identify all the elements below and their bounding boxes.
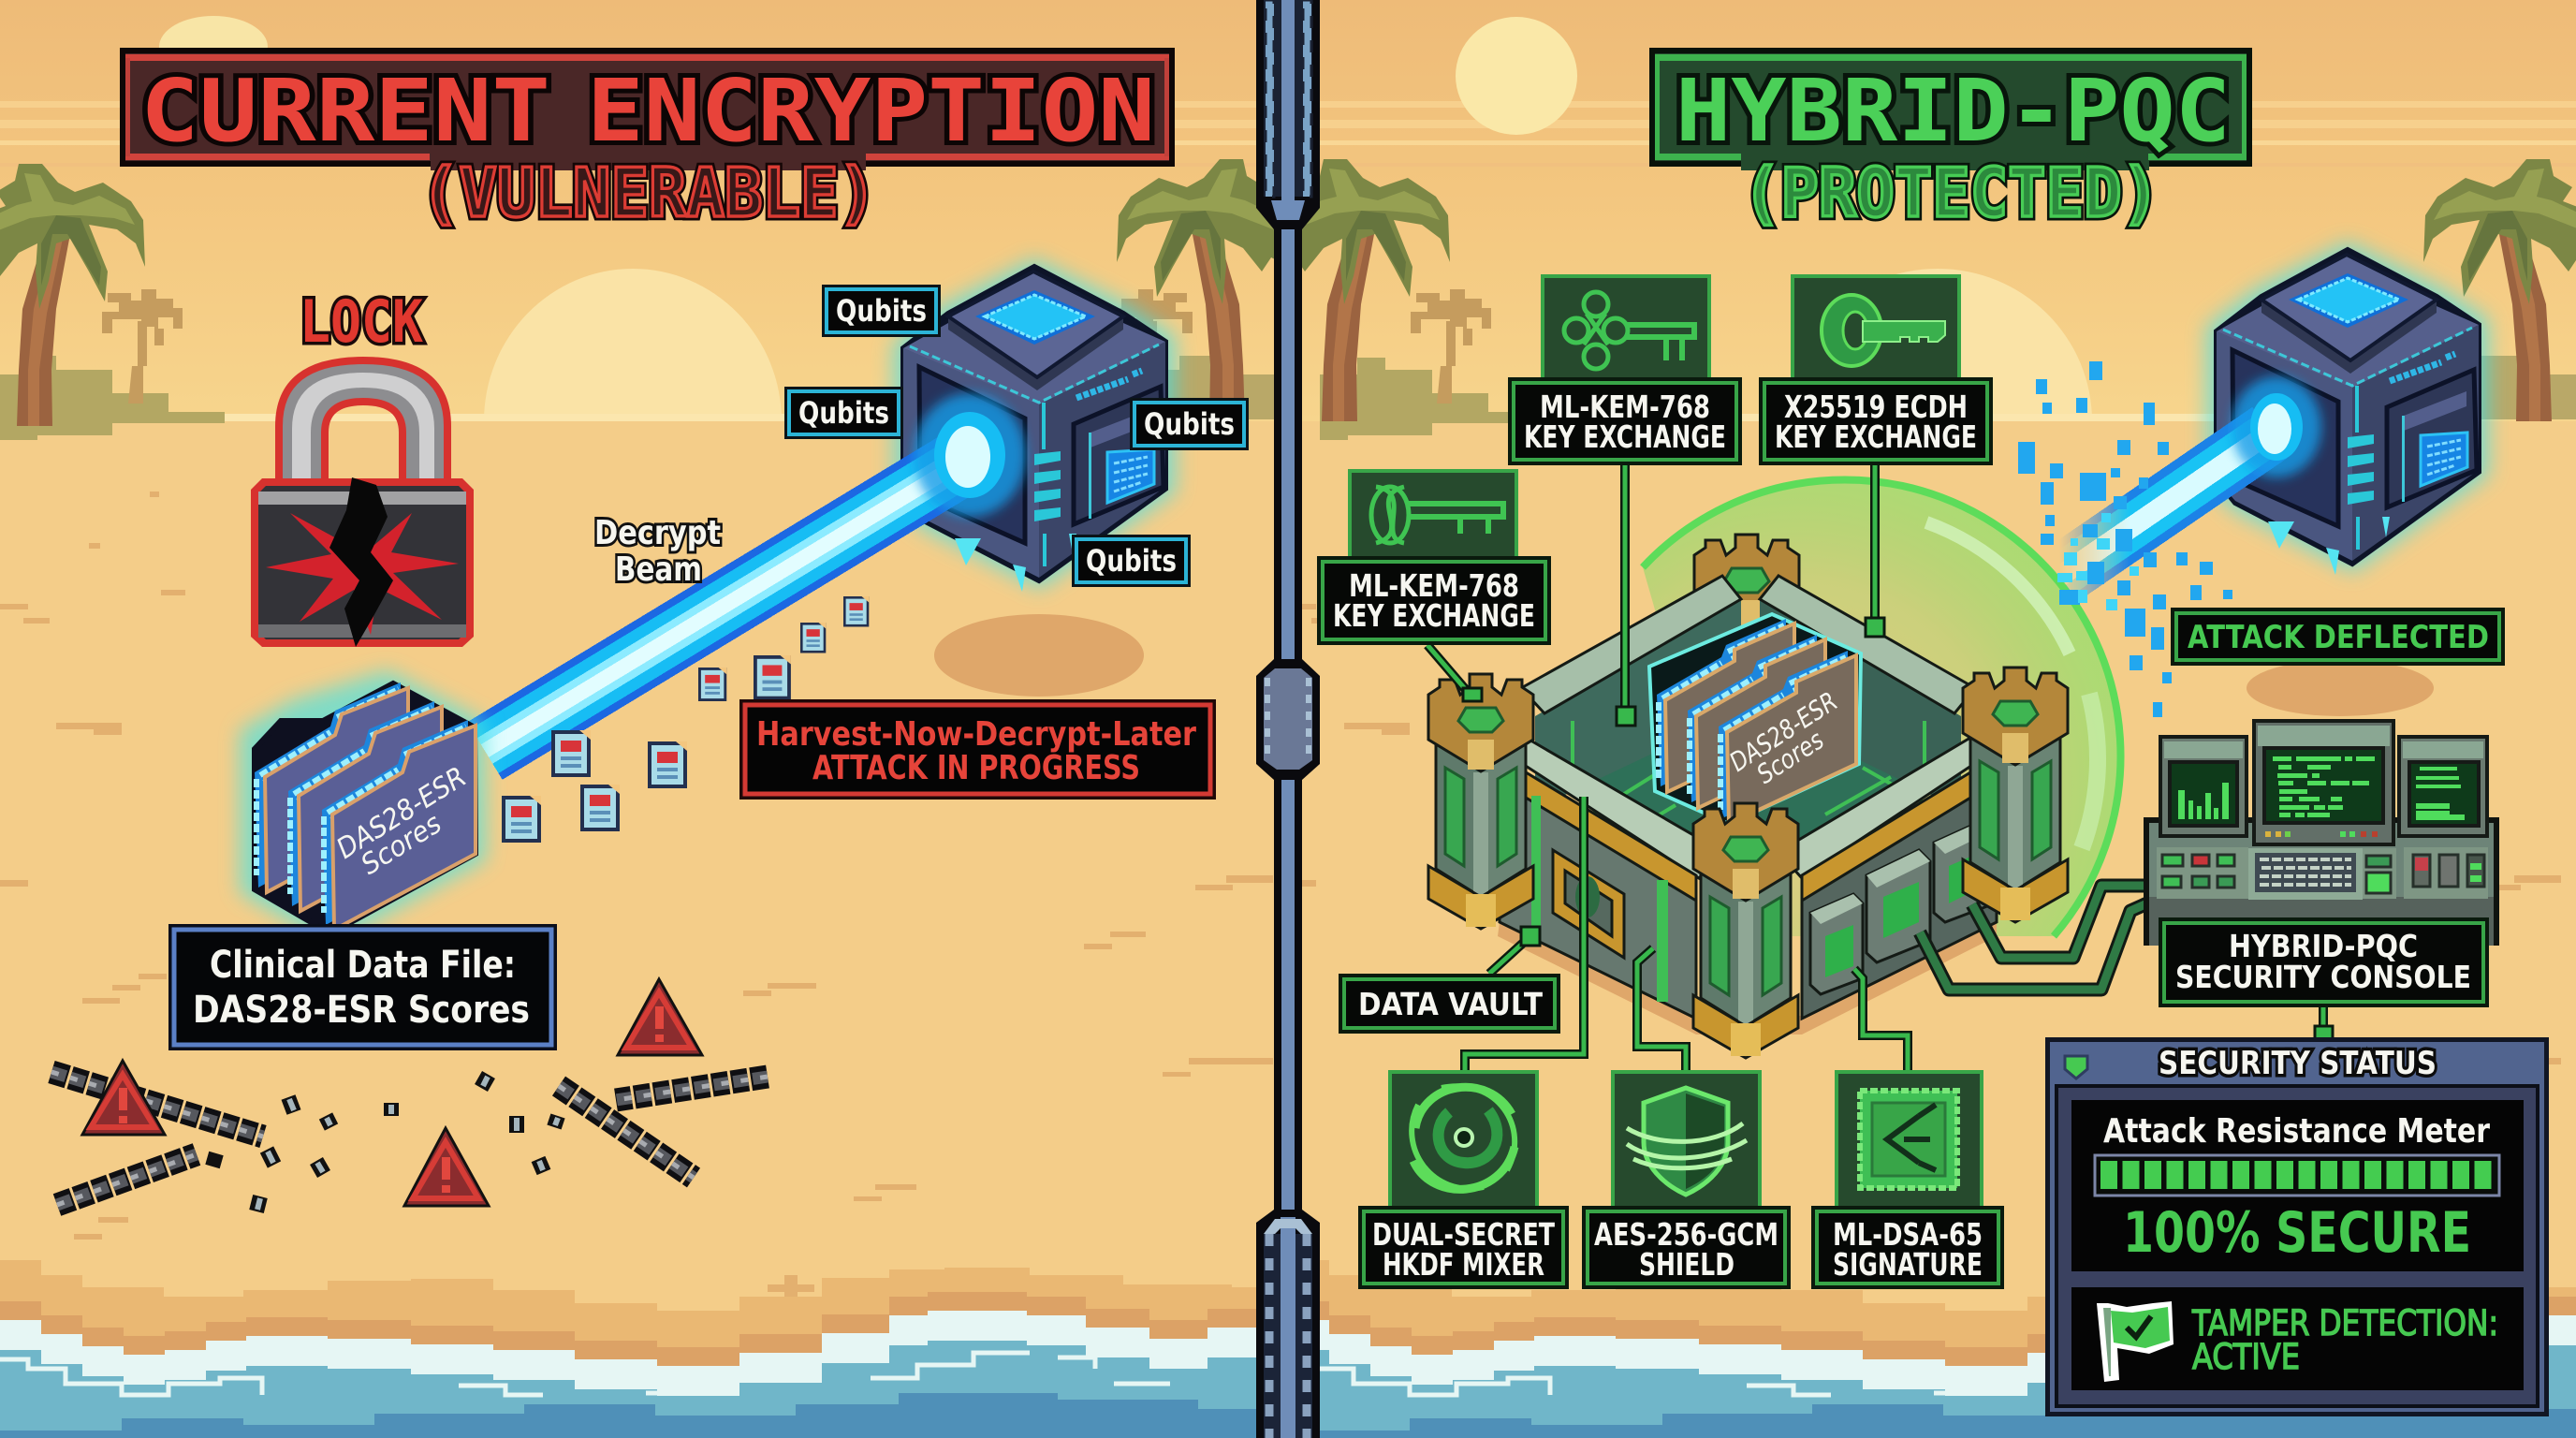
data vault building: DAS28-ESR — [1724, 685, 1843, 778]
data vault building — [1428, 535, 2068, 1058]
left monitor with bar chart — [2160, 737, 2247, 836]
label: qubits right: Qubits — [1144, 406, 1235, 442]
attack resistance meter: Attack Resistance Meter — [2103, 1112, 2490, 1151]
tile: HKDF mixer: DUAL-SECRET — [1372, 1216, 1555, 1253]
title banner: current encryption: ENCRYPTION — [587, 61, 1155, 161]
tile: HKDF mixer — [1358, 1072, 1569, 1289]
subtitle: vulnerable: (VULNERABLE) — [421, 154, 876, 232]
security console — [2144, 721, 2499, 946]
energy shield dome — [1643, 479, 2121, 936]
clinical data folder: DAS28-ESR — [331, 760, 473, 866]
tile: AES shield: AES-256-GCM — [1594, 1216, 1778, 1253]
label: data vault — [1339, 974, 1560, 1034]
attack resistance meter: 100% SECURE — [2123, 1200, 2471, 1266]
tile: ML-KEM-768 lower: ML-KEM-768 — [1349, 567, 1519, 604]
warning triangle left — [82, 1061, 165, 1135]
deflected attack beam and particles — [2018, 361, 2321, 717]
warning triangle bottom — [404, 1128, 489, 1206]
harvested data fragments — [502, 596, 869, 843]
label: qubits bottom: Qubits — [1086, 543, 1177, 579]
beach sand marks, shoreline and sea — [0, 492, 2576, 1438]
label: attack deflected: ATTACK DEFLECTED — [2188, 619, 2489, 656]
central divider — [1256, 0, 1320, 1438]
clinical data folder — [250, 682, 476, 933]
label: security console: HYBRID-PQC — [2229, 928, 2418, 964]
subtitle: protected: (PROTECTED) — [1743, 154, 2159, 232]
tile: ML-DSA signature: ML-DSA-65 — [1833, 1216, 1983, 1253]
label: security console: SECURITY CONSOLE — [2175, 959, 2471, 995]
tile: ML-KEM-768 top: ML-KEM-768 — [1540, 389, 1710, 425]
label: decrypt beam: Beam — [615, 550, 702, 589]
icon: green flag with check — [2097, 1301, 2174, 1382]
title banner: hybrid-pqc: HYBRID-PQC — [1676, 61, 2231, 161]
tamper detection status: ACTIVE — [2192, 1337, 2300, 1377]
icon: knot key — [1564, 292, 1694, 369]
suns — [159, 16, 2247, 421]
label: decrypt beam: Decrypt — [594, 514, 721, 552]
tile: X25519 ECDH — [1759, 276, 1993, 465]
subtitle: protected: (PROTECTED) — [1743, 154, 2159, 232]
subtitle: vulnerable: (VULNERABLE) — [421, 154, 876, 232]
console controls — [2157, 847, 2488, 900]
tile: X25519 ECDH: X25519 ECDH — [1784, 389, 1968, 425]
title banner: current encryption: CURRENT — [140, 61, 550, 161]
tile: ML-KEM-768 lower — [1317, 471, 1551, 645]
cables from vault to console — [1920, 886, 2158, 990]
icon: tangled key — [1371, 487, 1503, 543]
label: decrypt beam — [594, 514, 721, 589]
tile: HKDF mixer: HKDF MIXER — [1383, 1246, 1544, 1283]
tile: ML-KEM-768 top — [1508, 276, 1742, 465]
quantum computer cube — [903, 267, 1165, 592]
label: attack deflected — [2171, 608, 2505, 666]
icon: stamp signature — [1860, 1091, 1957, 1188]
icon: spiral vortex — [1412, 1086, 1515, 1189]
palm trees and ground bushes — [0, 159, 2576, 440]
callout: harvest now decrypt later — [739, 699, 1216, 800]
tamper detection status: TAMPER DETECTION: — [2191, 1303, 2498, 1343]
broken chains — [51, 1072, 768, 1211]
callout: harvest now decrypt later: ATTACK IN PROGRESS — [812, 749, 1140, 787]
tile: X25519 ECDH: KEY EXCHANGE — [1775, 418, 1977, 455]
data vault building: Scores — [1751, 725, 1829, 790]
label: qubits right — [1130, 398, 1249, 450]
tile: ML-DSA signature — [1811, 1072, 2004, 1289]
label: qubits bottom — [1072, 535, 1191, 587]
panel: security status — [2045, 1037, 2549, 1416]
tile: ML-KEM-768 top: KEY EXCHANGE — [1524, 418, 1726, 455]
decrypt beam — [485, 393, 1026, 751]
icon: shield — [1627, 1088, 1747, 1195]
title banner: current encryption — [120, 48, 1175, 167]
label: data vault: DATA VAULT — [1358, 986, 1543, 1022]
label: qubits top — [822, 285, 941, 337]
panel: hybrid-pqc (protected) — [1317, 48, 2549, 1416]
label: clinical data file — [168, 924, 557, 1050]
tile: ML-DSA signature: SIGNATURE — [1833, 1246, 1983, 1283]
heading: security status: SECURITY STATUS — [2159, 1045, 2437, 1082]
label: security console — [2159, 917, 2489, 1007]
center monitor with code — [2254, 721, 2393, 844]
label: qubits left — [784, 387, 903, 439]
label: clinical data file: Clinical Data File: — [210, 944, 516, 987]
attack resistance meter — [2071, 1100, 2524, 1271]
warning triangle top — [618, 979, 702, 1055]
tile: AES shield: SHIELD — [1639, 1246, 1734, 1283]
panel: current encryption (vulnerable) — [51, 48, 1249, 1211]
icon: broken padlock — [251, 360, 474, 647]
tile: AES shield — [1582, 1072, 1791, 1289]
callout: harvest now decrypt later: Harvest-Now-Decrypt-Later — [756, 715, 1196, 754]
tamper detection status — [2071, 1287, 2524, 1390]
icon: small shield — [2065, 1056, 2087, 1078]
label: qubits top: Qubits — [836, 293, 927, 329]
connector lines — [1427, 465, 2333, 1075]
label: lock: LOCK — [300, 287, 424, 356]
label: clinical data file: DAS28-ESR Scores — [193, 989, 530, 1032]
tile: ML-KEM-768 lower: KEY EXCHANGE — [1333, 597, 1535, 634]
right monitor with text bars — [2399, 737, 2487, 836]
clinical data folder: Scores — [356, 807, 447, 882]
icon: ecdh key — [1822, 295, 1945, 366]
label: qubits left: Qubits — [798, 395, 889, 431]
quantum computer cube attacking — [2217, 250, 2479, 575]
